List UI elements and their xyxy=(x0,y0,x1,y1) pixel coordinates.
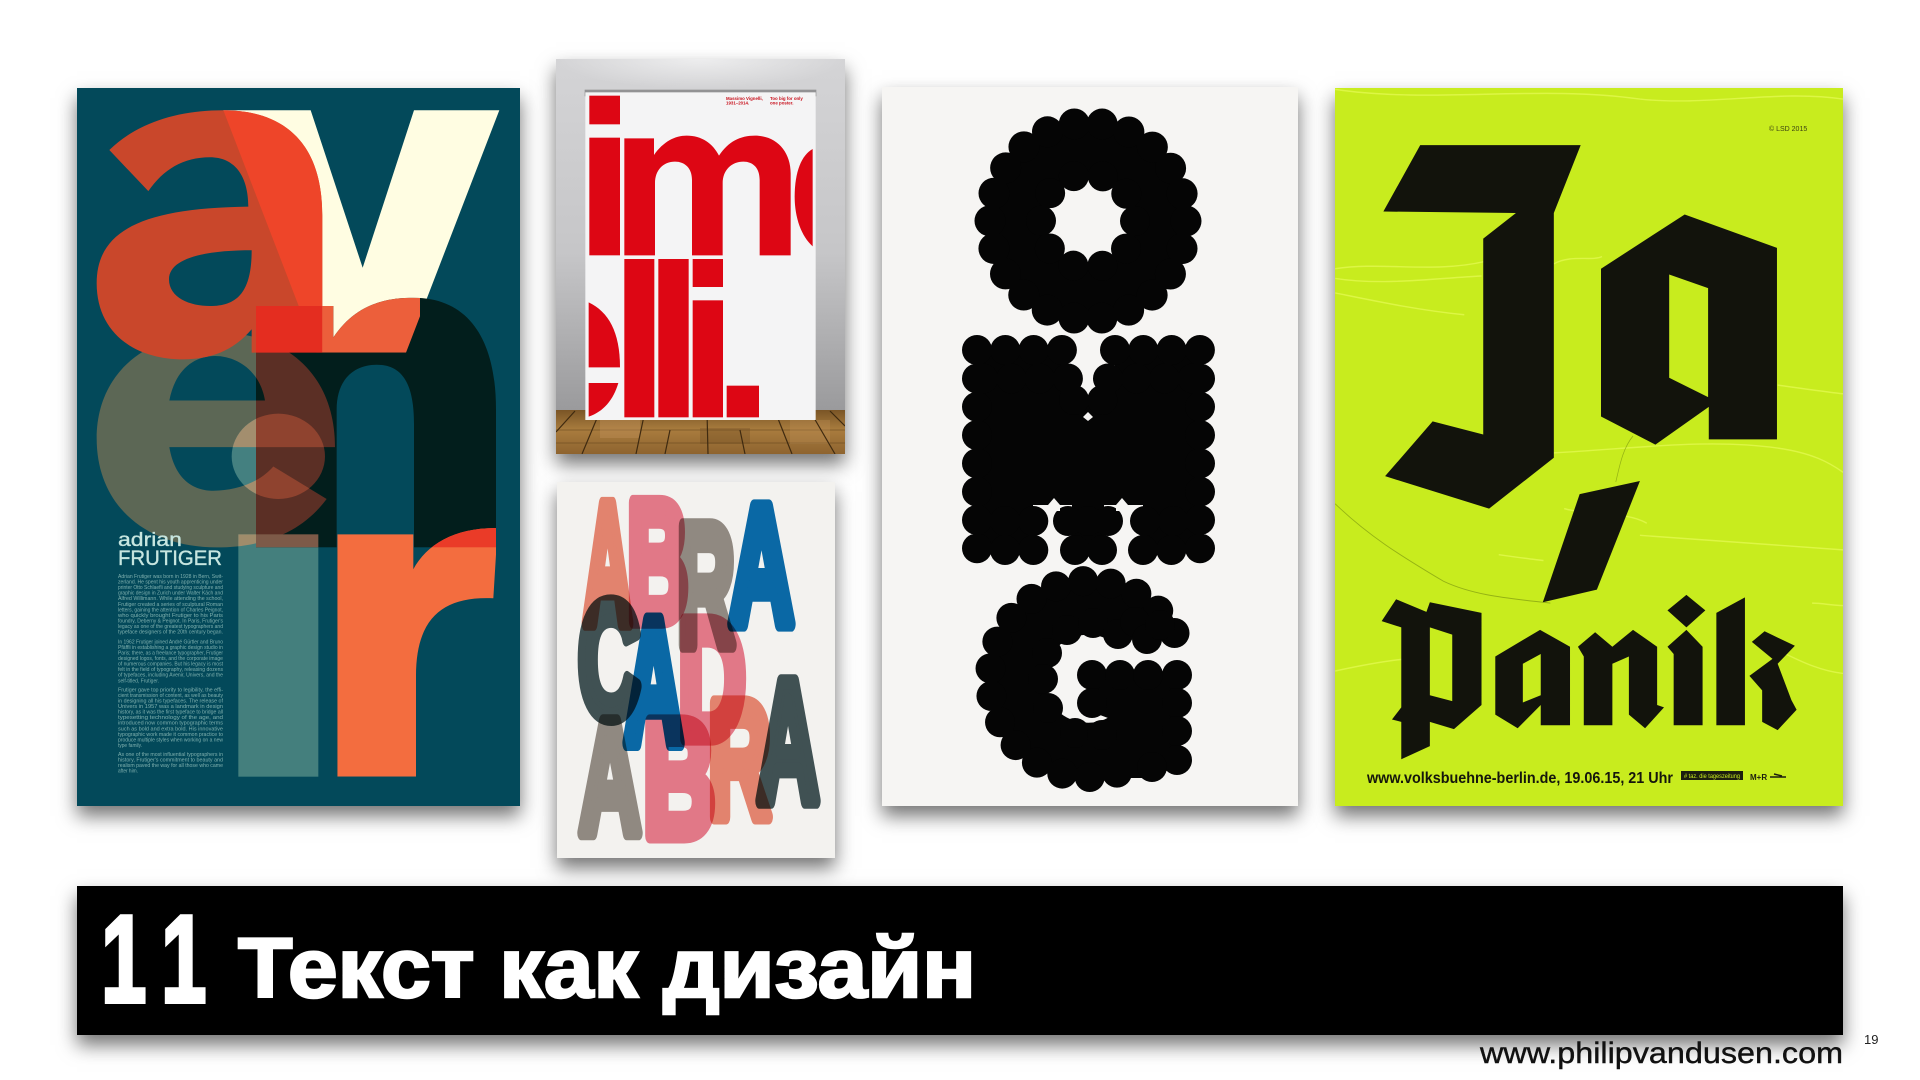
poster body copy: Univers in 1957 was a landmark in design xyxy=(118,704,223,710)
poster body copy: in designing all his typefaces. The release of xyxy=(118,698,224,704)
large letters a v e n i r xyxy=(93,104,500,782)
overprinted letters: A xyxy=(624,584,683,782)
title bar xyxy=(77,886,1843,1035)
paper wrinkles xyxy=(1335,89,1843,673)
overprinted letters: R xyxy=(677,488,735,682)
panel: Avenir / Adrian Frutiger poster xyxy=(77,88,520,806)
poster body copy: designed logos, fonts, and the corporate image xyxy=(118,656,223,662)
event line: www.volksbuehne-berlin.de, 19.06.15, 21 Uhr xyxy=(1366,770,1673,787)
poster body copy: type family. xyxy=(118,743,142,749)
poster body copy: In 1962 Frutiger joined André Gürtler and Bruno xyxy=(118,639,223,645)
poster body copy: legacy as one of the greatest typographers and xyxy=(118,624,223,630)
poster name: adrian FRUTIGER: FRUTIGER xyxy=(118,547,222,570)
wall xyxy=(556,59,845,411)
poster body copy: printer Otto Schlaefli and studying sculpture and xyxy=(118,585,223,591)
poster body copy: Alfred Willimann. While attending the school, xyxy=(118,596,223,602)
panel: Massimo Vignelli poster on wall xyxy=(556,59,845,454)
poster credit text: Too big for only xyxy=(770,96,803,101)
poster body copy: produce multiple styles when working on a new xyxy=(118,737,223,743)
poster body copy: after him. xyxy=(118,769,138,775)
poster body copy: felt in the field of typography, releasing dozens xyxy=(118,667,224,673)
poster name: adrian FRUTIGER: adrian xyxy=(118,530,182,551)
section number 11: 1 xyxy=(161,891,207,1029)
wooden floor xyxy=(556,410,845,454)
poster body copy: of numerous companies. But his legacy is most xyxy=(118,662,224,668)
poster body copy: Frutiger created a series of sculptural Roman xyxy=(118,602,223,608)
panel: OMG scalloped letters poster xyxy=(882,87,1298,806)
overprinted letters: A xyxy=(757,644,819,838)
poster credit text: 1931–2014. xyxy=(726,100,749,106)
poster credit text: one poster. xyxy=(770,100,793,106)
letter G xyxy=(990,581,1192,782)
poster body copy: As one of the most influential typographers in xyxy=(118,752,223,758)
poster body copy: Frutiger gave top priority to legibility, the effi- xyxy=(118,687,223,693)
poster body copy: history, as it was the first typeface to bridge all xyxy=(118,710,223,716)
red giant letters: imo elli. xyxy=(589,96,813,417)
poster sheet xyxy=(585,90,816,420)
poster body copy: typeface designers of the 20th century began. xyxy=(118,630,223,636)
poster body copy: of typefaces, including Avenir, Univers, and the xyxy=(118,673,223,679)
sponsor logos: M+R xyxy=(1750,773,1767,782)
poster body copy: Pfäffli in establishing a graphic design studio in xyxy=(118,645,223,651)
panel: ABRACADABRA poster xyxy=(557,482,835,858)
poster body copy: letters, gaining the attention of Charles Peignot, xyxy=(118,607,223,613)
section number 11: 1 xyxy=(101,891,147,1029)
overprinted letters: D xyxy=(678,586,746,775)
poster body copy: typesetting technology of the age, and xyxy=(118,715,223,721)
overprinted letters xyxy=(578,465,819,872)
poster body copy: who quickly brought Frutiger to his Paris xyxy=(118,613,224,619)
poster body copy: realism paved the way for all those who came xyxy=(118,763,223,769)
letter O xyxy=(990,123,1186,319)
poster body copy: introduced now common typographic terms xyxy=(118,721,224,727)
poster body copy: such as bold and extra bold. His innovative xyxy=(118,726,223,732)
poster body copy: cient transmission of content, as well as beauty xyxy=(118,693,223,699)
copyright note: © LSD 2015 xyxy=(1769,125,1807,133)
sponsor logos: # taz. die tageszeitung xyxy=(1684,774,1740,780)
poster body copy: Adrian Frutiger was born in 1928 in Bern, Swit- xyxy=(118,574,223,580)
overprinted letters: C xyxy=(578,568,640,752)
large Ja comma and panik blackletter xyxy=(1382,145,1797,759)
poster body copy xyxy=(118,574,224,775)
poster body copy: Paris; there, as a freelance typographer, Frutiger xyxy=(118,650,223,656)
poster credit text: Massimo Vignelli, xyxy=(726,96,763,101)
overprinted letters: R xyxy=(708,668,771,853)
page number: 19 xyxy=(1864,1032,1878,1047)
sponsor logos xyxy=(1681,771,1786,782)
panel: Ja, panik neon poster xyxy=(1335,88,1843,806)
poster body copy: self-titled, Frutiger. xyxy=(118,678,159,684)
poster name: adrian FRUTIGER xyxy=(118,530,222,570)
website footer: www.philipvandusen.com xyxy=(1479,1037,1843,1070)
poster body copy: foundry, Deberny & Peignot. In Paris, Frutiger's xyxy=(118,618,223,624)
poster body copy: graphic design in Zurich under Walter Käch and xyxy=(118,591,223,597)
poster body copy: typographic work made it common practice to xyxy=(118,732,223,738)
poster body copy: zerland. He spent his youth apprenticing under xyxy=(118,580,223,586)
letter M xyxy=(977,350,1200,550)
poster body copy: history, Frutiger's commitment to beauty and xyxy=(118,758,223,764)
section heading: Текст как дизайн xyxy=(238,921,976,1015)
poster credit text xyxy=(726,96,803,106)
